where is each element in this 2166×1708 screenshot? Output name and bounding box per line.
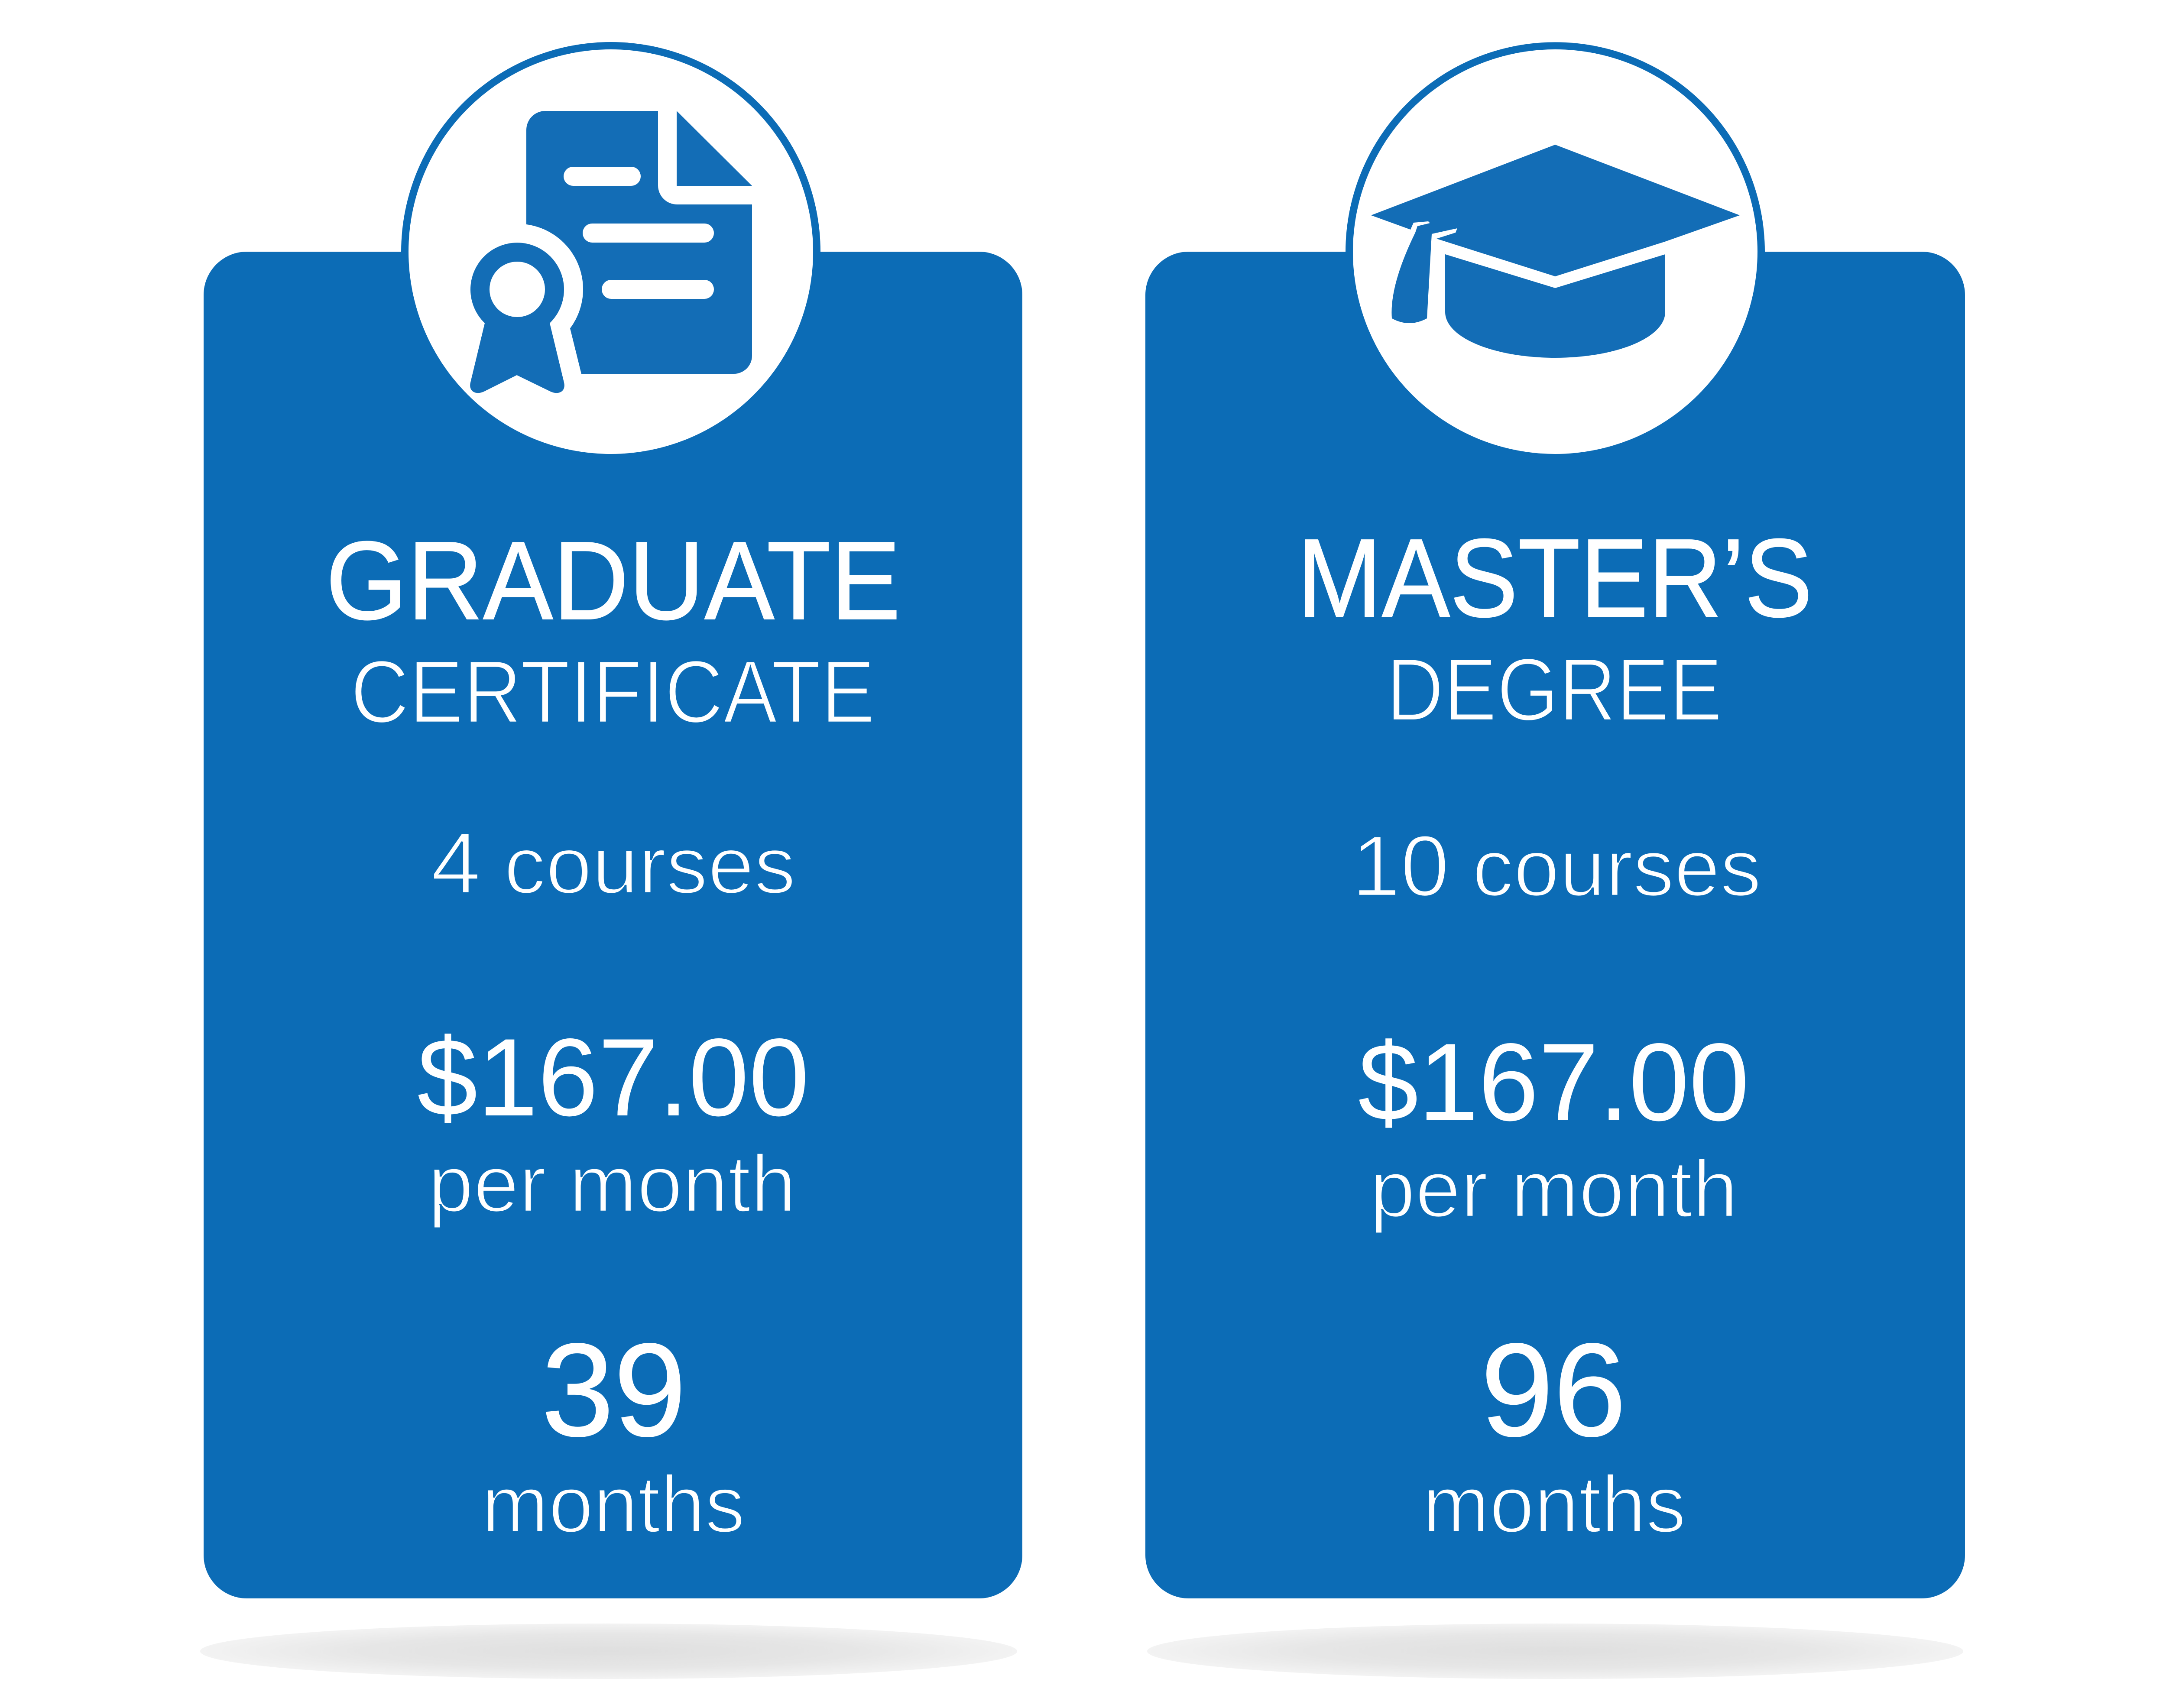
badge ring — [401, 42, 820, 252]
heading: graduate: GRADUATE — [326, 519, 901, 643]
price unit: per month — [428, 1138, 796, 1229]
icon: award ribbon — [470, 243, 564, 393]
monthly price: $167.00 — [417, 1016, 809, 1139]
subheading: certificate: CERTIFICATE — [350, 642, 875, 742]
badge ring — [1346, 42, 1765, 252]
icon: graduation cap — [1371, 145, 1740, 358]
panel: master's degree — [1145, 42, 1965, 1679]
floor shadow — [200, 1624, 1017, 1679]
subheading: degree: DEGREE — [1386, 640, 1722, 739]
duration unit: months — [1423, 1459, 1686, 1549]
duration unit: months — [482, 1459, 745, 1549]
monthly price: $167.00 — [1358, 1021, 1749, 1144]
icon badge: graduation cap — [1346, 42, 1765, 454]
icon: document — [526, 111, 752, 374]
price unit: per month — [1370, 1144, 1738, 1234]
duration number: 39 — [542, 1316, 686, 1464]
panel: graduate certificate — [200, 42, 1022, 1679]
course count: 10 courses — [1352, 818, 1761, 914]
badge disc — [409, 49, 813, 454]
course count: 4 courses — [431, 814, 796, 912]
duration number: 96 — [1481, 1316, 1626, 1464]
panel background — [204, 252, 1022, 1598]
floor shadow — [1147, 1624, 1963, 1679]
icon badge: certificate — [401, 42, 820, 454]
panel background — [1145, 252, 1965, 1598]
badge disc — [1353, 49, 1757, 454]
heading: master's: MASTER’S — [1297, 516, 1813, 640]
